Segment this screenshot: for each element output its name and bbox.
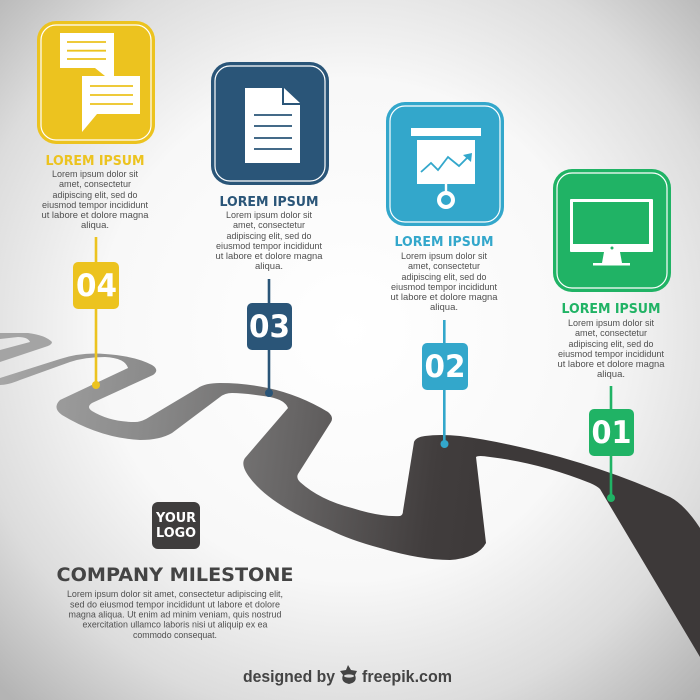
text block 02: amet, consectetur [408,261,480,271]
description: Lorem ipsum dolor sit amet, consectetur adipiscing elit, [67,589,283,599]
pin 02: 02 [424,349,466,385]
text block 02 [390,251,498,312]
text block 04: ut labore et dolore magna [42,210,149,220]
pin 02 [422,320,468,448]
text block 04 [42,169,149,230]
description [67,589,283,640]
text block 01: Lorem ipsum dolor sit [568,318,654,328]
text block 04: aliqua. [81,220,109,230]
pin 03 [247,279,292,397]
text block 03 [216,210,323,271]
description: commodo consequat. [133,630,217,640]
freepik credit: freepik.com [362,668,452,686]
text block 01: adipiscing elit, sed do [568,339,654,349]
title: COMPANY MILESTONE [56,565,294,586]
text block 01: eiusmod tempor incididunt [558,349,664,359]
description: magna aliqua. Ut enim ad minim veniam, quis nostrud [68,610,282,620]
text block 03: adipiscing elit, sed do [226,231,312,241]
card: green monitor icon [553,169,671,292]
pin 04 [73,237,119,389]
card: yellow chat icon [37,21,155,144]
pin 04: 04 [76,268,117,304]
text block 01: amet, consectetur [575,328,647,338]
text block 01: ut labore et dolore magna [558,359,665,369]
logo badge: YOUR [155,510,196,526]
pin 01: 01 [592,415,632,451]
text block 01 [558,318,665,379]
text block 02: eiusmod tempor incididunt [391,282,497,292]
heading 03: LOREM IPSUM [220,194,318,210]
text block 02: ut labore et dolore magna [390,292,498,302]
text block 01: aliqua. [597,369,625,379]
milestone 01 [553,169,671,502]
card: blue presentation icon [386,102,504,226]
winding road [0,333,700,657]
text block 02: adipiscing elit, sed do [402,272,486,282]
card: navy document icon [211,62,329,185]
logo badge [152,502,200,549]
text block 02: Lorem ipsum dolor sit [401,251,487,261]
heading 01: LOREM IPSUM [562,301,660,317]
text block 04: amet, consectetur [59,179,131,189]
text block 04: adipiscing elit, sed do [52,190,138,200]
heading 02: LOREM IPSUM [394,234,494,250]
text block 03: ut labore et dolore magna [216,251,323,261]
text block 04: eiusmod tempor incididunt [42,200,148,210]
icon: freepik mascot [340,665,357,684]
description: exercitation ullamco laboris nisi ut aliquip ex ea [82,620,268,630]
freepik credit: designed by [243,668,336,686]
text block 04: Lorem ipsum dolor sit [52,169,138,179]
freepik credit [243,665,452,686]
description: sed do eiusmod tempor incididunt ut labore et dolore [70,600,280,610]
pin 03: 03 [249,309,290,345]
heading 04: LOREM IPSUM [46,153,144,169]
text block 03: aliqua. [255,261,283,271]
text block 03: amet, consectetur [233,220,305,230]
text block 03: Lorem ipsum dolor sit [226,210,312,220]
logo badge: LOGO [156,525,196,541]
pin 01 [589,386,634,502]
text block 03: eiusmod tempor incididunt [216,241,322,251]
milestone 04 [37,21,155,389]
milestone 02 [386,102,504,448]
text block 02: aliqua. [430,302,458,312]
milestone 03 [211,62,329,397]
